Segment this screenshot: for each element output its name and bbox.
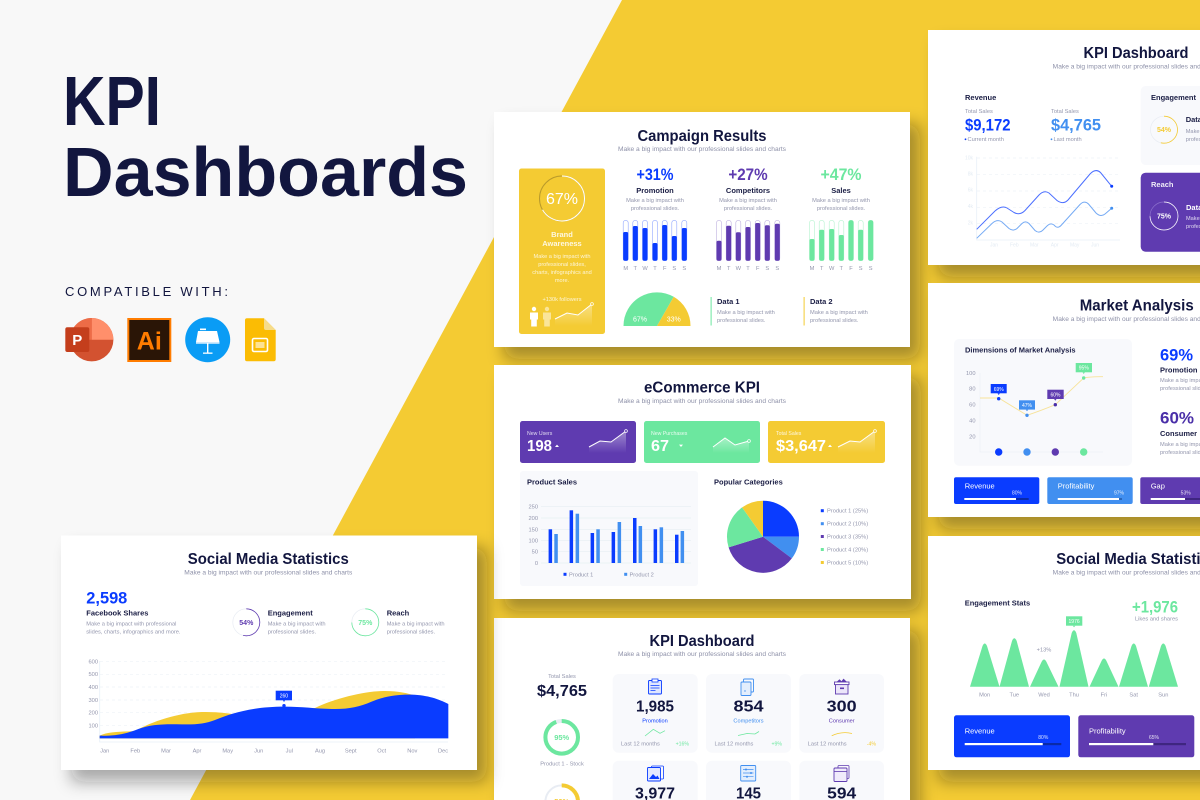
column: Competitors: Make a big impact with [719,198,777,204]
progress card: Profitability [1047,477,1133,504]
revenue figures: Total Sales [965,109,993,115]
stat: Engagement ring: Make a big impact with [268,622,326,628]
bar chart: Product Sales: Product Sales [527,478,577,487]
card: Engagement: 54% [1157,127,1172,134]
stat: 2,598 Facebook Shares: Make a big impact with professional [86,622,176,628]
panel: Campaign Results [494,112,910,347]
donut: 50% [545,785,578,800]
stat: Engagement ring: Engagement [268,608,313,617]
area chart: shares by month: 100 [88,723,98,729]
stat card: 1,985 Promotion: 1,985 [636,699,674,716]
line chart: Dimensions of Market Analysis: 47% [1022,403,1033,409]
area chart: shares by month: Aug [315,749,325,755]
line chart: revenue [965,156,1120,249]
column: Sales: +47% [820,166,862,184]
callout: Data 1: Data 1 [717,297,740,306]
stat card: 300 Consumer [799,674,884,753]
callout: Data 2: professional slides. [810,318,859,324]
column: Sales: T [840,266,844,272]
stat card: 1,985 Promotion [613,674,698,753]
line chart: Dimensions of Market Analysis: 40 [969,419,976,425]
peak chart: engagement by day [970,616,1178,699]
line chart: revenue: May [1070,243,1080,249]
peak chart: engagement by day: Thu [1069,693,1079,699]
area chart: shares by month: Jul [286,749,293,755]
column: Promotion: professional slides. [631,206,680,212]
line chart: revenue: Feb [1010,243,1019,249]
line chart: Dimensions of Market Analysis: 95% [1079,366,1089,372]
stat card: 300 Consumer: Consumer [829,719,855,725]
column: Promotion: Make a big impact with [626,198,684,204]
progress card: Profitability: 97% [1114,490,1125,496]
KPI card: New Users [520,421,636,463]
column: Competitors: F [756,266,760,272]
KPI card: New Users: New Users [527,431,553,437]
brand awareness card: more. [555,278,570,284]
revenue figures: $4,765 [1051,117,1101,135]
column: Sales [810,166,873,272]
line chart: revenue: 10k [965,156,973,162]
progress card: Revenue: Revenue [965,482,995,491]
KPI card: New Purchases: New Purchases [651,431,688,437]
area chart: shares by month: Jan [100,749,109,755]
progress card: Profitability: Profitability [1089,726,1126,735]
column: Sales: M [810,266,815,272]
column: Competitors: W [736,266,742,272]
column: Competitors: M [717,266,722,272]
KPI card: New Purchases: 67 [651,438,669,455]
panel: Market Analysis [928,283,1200,517]
bar chart: Product Sales: 50 [532,550,538,556]
subheading: Make a big impact with our professional slides and charts [618,651,786,658]
background: light diagonal area [0,0,622,800]
line chart: Dimensions of Market Analysis: 69% [994,387,1004,393]
subheading: Make a big impact with our professional slides and charts [184,569,352,576]
stat card: 1,985 Promotion: +16% [676,742,689,748]
icon: Google Slides [245,318,276,361]
stat: Reach ring: professional slides. [387,630,435,636]
peak chart: engagement by day: Mon [979,693,990,699]
line chart: revenue: 2k [968,220,973,226]
column: Sales: T [820,266,824,272]
callout: Data 1: Make a big impact with [717,310,775,316]
KPI card: Total Sales [768,421,885,463]
stat: Engagement ring [233,608,326,636]
stat card: 854 Competitors: Last 12 months [714,742,754,748]
brand awareness card: 67% [546,191,578,208]
bar chart: Product Sales [520,471,698,586]
stat: 2,598 Facebook Shares: Facebook Shares [86,608,148,617]
stat: +1,976: Likes and shares [1135,616,1178,622]
bar chart: Product Sales: 200 [528,516,538,522]
callout: Data 2: Data 2 [810,297,833,306]
column: Promotion: Promotion [636,186,674,195]
card: Reach: Reach [1151,180,1174,189]
total sales: Total Sales [548,674,576,680]
peak chart: engagement by day: Sat [1129,693,1138,699]
icon: Keynote [185,317,230,362]
column: Sales: W [829,266,835,272]
total sales [537,674,587,700]
brand awareness card: professional slides, [538,262,586,268]
progress card: Revenue [954,715,1070,757]
peak chart: engagement by day: Tue [1010,693,1019,699]
stat card: 1,985 Promotion: Last 12 months [621,742,660,748]
revenue figures [965,93,1101,143]
stat card: 854 Competitors: +9% [771,742,782,748]
stat: Reach ring: Reach [387,608,410,617]
column: Sales: Make a big impact with [812,198,870,204]
pie chart: Popular Categories: Popular Categories [714,478,783,487]
line chart: Dimensions of Market Analysis: 100 [966,371,976,377]
area chart: shares by month: Dec [438,749,448,755]
stat: 2,598 Facebook Shares: 2,598 [86,588,127,607]
icon: Adobe Illustrator: Ai [137,328,162,356]
stat: Engagement ring: 54% [239,620,254,627]
heading: KPI Dashboard [1084,45,1188,62]
brand awareness card: +130k followers [542,297,582,303]
line chart: revenue: Apr [1051,243,1059,249]
icon: PowerPoint [65,318,113,361]
area chart: shares by month: Nov [407,749,418,755]
stat card: 300 Consumer: Last 12 months [808,742,847,748]
column: Sales: F [849,266,853,272]
area chart: shares by month: Feb [130,749,140,755]
progress card: Profitability: 65% [1149,735,1160,741]
stat: 60% Consumer [1160,409,1200,456]
area chart: shares by month: Mar [161,749,171,755]
panel: KPI Dashboard (top right) [928,30,1200,265]
peak chart: engagement by day: 1976 [1069,619,1080,625]
pie chart: Popular Categories: Product 4 (20%) [827,548,868,554]
panel: eCommerce KPI [494,365,911,599]
stat: Reach ring [352,608,445,636]
revenue figures: Last month [1054,137,1082,143]
stat card: 145 [706,761,791,800]
line chart: revenue: Jan [990,243,998,249]
stat: Engagement ring: professional slides. [268,630,316,636]
brand awareness card: charts, infographics and [532,270,592,276]
stat: +1,976: +1,976 [1132,598,1178,617]
donut: 95%: 95% [554,733,570,742]
icon: Adobe Illustrator [128,319,170,361]
line chart: Dimensions of Market Analysis: 20 [969,434,976,440]
stat: Reach ring: Make a big impact with [387,622,445,628]
progress card: Profitability: Profitability [1058,482,1095,491]
area chart: shares by month: Jun [254,749,263,755]
progress card: Profitability [1078,715,1194,757]
column: Sales: Sales [831,186,851,195]
brand awareness card: Brand [551,230,573,239]
stat: Reach ring: 75% [358,620,373,627]
line chart: revenue: 8k [968,172,973,178]
pie chart: Popular Categories: Product 5 (10%) [827,560,868,566]
column: Promotion: S [682,266,686,272]
KPI card: Total Sales: Total Sales [776,431,802,437]
semicircle chart 67/33: 67% [633,316,647,324]
column: Sales: professional slides. [817,206,866,212]
peak chart: engagement by day: +13% [1037,647,1051,653]
bar chart: Product Sales: Product 1 [569,572,593,578]
progress card: Revenue: 80% [1012,490,1023,496]
area chart: shares by month: May [222,749,233,755]
callout: Data 2 [804,297,868,326]
main title: Dashboards [63,133,468,211]
bar chart: Product Sales: 250 [528,505,538,511]
panel: Social Media Statistics (right) [928,536,1200,770]
subheading: Make a big impact with our professional slides and charts [618,146,786,153]
bar chart: Product Sales: 150 [528,527,538,533]
card: Engagement [1141,86,1200,165]
area chart: shares by month: Oct [377,749,387,755]
progress card: Revenue [954,477,1039,504]
line chart: Dimensions of Market Analysis: 60 [969,403,976,409]
stat: +1,976 [1132,598,1178,622]
panel: KPI Dashboard (lower) [494,618,910,800]
pie chart: Popular Categories: Product 1 (25%) [827,509,868,515]
area chart: shares by month: 500 [88,672,98,678]
column: Sales: S [859,266,863,272]
stat card: 1,985 Promotion: Promotion [642,719,668,725]
line chart: Dimensions of Market Analysis [954,339,1132,466]
column: Promotion: F [663,266,667,272]
column: Promotion: W [642,266,648,272]
brand awareness card [519,168,605,334]
card: Engagement: Engagement [1151,93,1197,102]
column: Promotion: +31% [636,166,674,184]
KPI card: Total Sales: $3,647 [776,438,826,455]
revenue figures: Revenue [965,93,996,102]
panel: Social Media Statistics (left) [61,536,477,770]
area chart: shares by month: 300 [88,698,98,704]
chart heading: Engagement Stats [965,598,1030,607]
line chart: Dimensions of Market Analysis: 60% [1050,392,1061,398]
stat: 69% Promotion [1160,345,1200,392]
stat card: 300 Consumer: 300 [827,699,857,716]
area chart: shares by month: 400 [88,685,98,691]
column: Promotion: T [634,266,638,272]
bar chart: Product Sales: 0 [535,561,538,567]
progress card: Revenue: 80% [1038,735,1049,741]
stat: 60% Consumer: Consumer [1160,429,1197,438]
column: Competitors: T [746,266,750,272]
KPI card: New Users: 198 [527,438,552,455]
line chart: Dimensions of Market Analysis: 80 [969,387,976,393]
peak chart: engagement by day: Wed [1038,693,1050,699]
column: Competitors: T [727,266,731,272]
callout: Data 1 [711,297,775,326]
column: Promotion: M [623,266,628,272]
revenue figures: Current month [968,137,1004,143]
heading: Market Analysis [1080,298,1194,315]
donut: 95%: Product 1 - Stock [540,762,584,768]
semicircle chart 67/33 [623,292,691,326]
heading: Campaign Results [638,128,767,145]
stat card: 3,977 [613,761,698,800]
area chart: shares by month: 600 [88,660,98,666]
pie chart: Popular Categories: Product 2 (10%) [827,522,868,528]
KPI card: New Purchases [644,421,760,463]
card: Reach [1141,173,1200,252]
line chart: revenue: Jun [1091,243,1099,249]
stat card: 300 Consumer: -4% [867,742,876,748]
stat card: 854 Competitors [706,674,791,753]
line chart: revenue: 6k [968,188,973,194]
heading: KPI Dashboard [650,633,754,650]
stat card: 594 [799,761,884,800]
revenue figures: Total Sales [1051,109,1079,115]
callout: Data 1: professional slides. [717,318,766,324]
main title: KPI [63,62,161,140]
column: Promotion: T [653,266,657,272]
column: Competitors: Competitors [726,186,770,195]
semicircle chart 67/33: 33% [667,316,681,324]
heading: eCommerce KPI [644,380,760,397]
callout: Data 2: Make a big impact with [810,310,868,316]
icon: PowerPoint: P [72,332,82,349]
heading: Social Media Statistics [188,551,349,568]
stat: 69% Promotion: 69% [1160,345,1193,364]
stat: 60% Consumer: 60% [1160,409,1194,428]
card: Reach: 75% [1157,214,1172,220]
progress card: Gap [1140,477,1200,504]
column: Competitors: S [775,266,779,272]
brand awareness card: Awareness [542,239,582,248]
stat: 2,598 Facebook Shares: slides, charts, infographics and more. [86,630,181,636]
brand awareness card: Make a big impact with [534,254,590,260]
progress card: Gap: 53% [1181,490,1191,496]
pie chart: Popular Categories: Product 3 (35%) [827,534,868,540]
column: Competitors: professional slides. [724,206,773,212]
revenue figures: $9,172 [965,117,1010,135]
total sales: $4,765 [537,683,587,700]
area chart: shares by month: Sept [345,749,357,755]
pie chart: Popular Categories [714,478,868,573]
line chart: revenue: 4k [968,204,973,210]
column: Promotion: S [672,266,676,272]
subheading: Make a big impact with our professional slides and charts [618,398,786,405]
stat card: 854 Competitors: Competitors [733,719,764,725]
area chart: shares by month [88,660,448,755]
column: Competitors: +27% [728,166,768,184]
progress card: Gap: Gap [1151,482,1165,491]
stat: 69% Promotion: Promotion [1160,365,1198,374]
compatible with label: COMPATIBLE WITH: [65,284,228,299]
line chart: revenue: Mar [1030,243,1039,249]
area chart: shares by month: Apr [193,749,202,755]
progress card: Revenue: Revenue [965,726,995,735]
line chart: Dimensions of Market Analysis: Dimensions of Market Analysis [965,345,1076,354]
column: Sales: S [869,266,873,272]
bar chart: Product Sales: Product 2 [630,572,654,578]
stat card: 854 Competitors: 854 [734,699,764,716]
donut: 95% [540,721,584,768]
column: Promotion [623,166,687,272]
bar chart: Product Sales: 100 [528,538,538,544]
peak chart: engagement by day: Sun [1158,693,1168,699]
column: Competitors [716,166,780,272]
area chart: shares by month: 260 [280,694,288,700]
area chart: shares by month: 200 [88,711,98,717]
main title [63,62,468,211]
peak chart: engagement by day: Fri [1101,693,1107,699]
stat: 2,598 Facebook Shares [86,588,181,636]
column: Competitors: S [765,266,769,272]
